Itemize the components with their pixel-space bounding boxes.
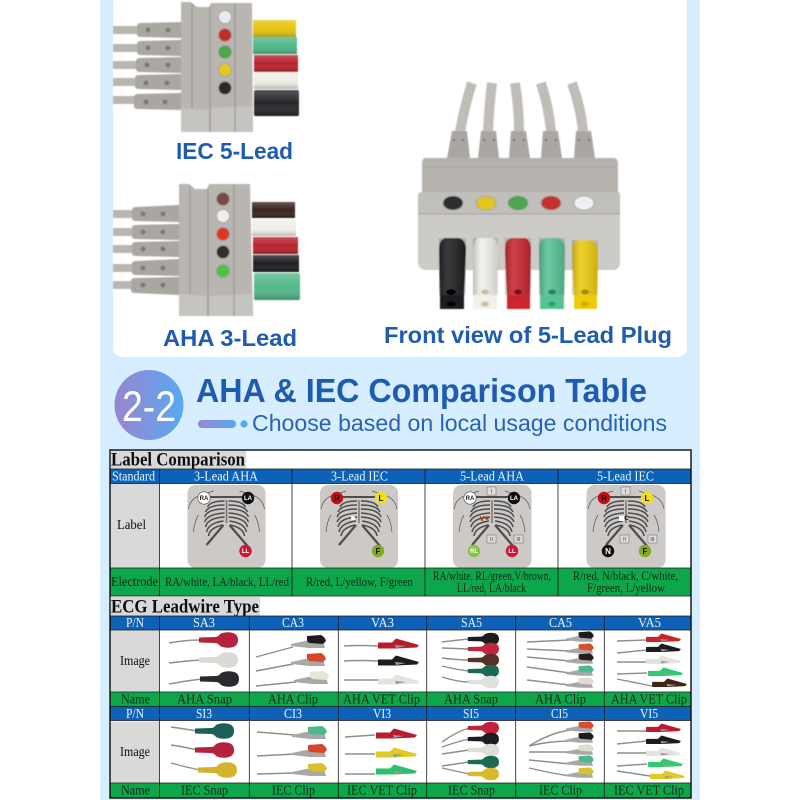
caption: Front view of 5-Lead Plug: Front view of 5-Lead Plug <box>384 322 672 348</box>
housing <box>179 184 253 316</box>
connector: IEC 5-lead side view <box>113 2 299 132</box>
leadwires: CI3 <box>257 726 327 776</box>
diagram: 3-lead AHA: LL <box>242 549 249 555</box>
leadwires: SI5 <box>442 722 499 780</box>
diagram: 3-lead AHA: LA <box>244 496 253 502</box>
relief holes <box>144 28 170 104</box>
leadwires: CA3 <box>256 635 329 686</box>
section subheading: Choose based on local usage conditions <box>252 410 667 436</box>
row: part numbers A: P/N <box>126 616 144 631</box>
row: part numbers B <box>110 706 691 722</box>
diagram: 5-lead AHA: II <box>490 537 493 543</box>
section badge 2-2 <box>114 370 184 440</box>
row: names A: AHA VET Clip <box>611 692 687 708</box>
diagram: 5-lead IEC: II <box>623 537 626 543</box>
row: names B: IEC Snap <box>448 784 495 798</box>
diagram: 5-lead AHA <box>453 485 532 568</box>
diagram: 5-lead AHA: LL <box>508 549 516 555</box>
row: Standard <box>110 469 691 484</box>
table outer border <box>110 450 691 798</box>
row: names A: Name <box>121 692 150 708</box>
plug shading <box>439 238 598 295</box>
row: names B <box>110 783 691 798</box>
diagram: 5-lead IEC: F <box>643 547 648 556</box>
row: Label <box>110 484 160 568</box>
leadwires: VA3 <box>344 638 419 684</box>
row: part numbers A: SA5 <box>461 616 482 631</box>
plug holes <box>446 289 589 306</box>
row: Standard: 5-Lead AHA <box>460 470 525 484</box>
leadwires: CA5 <box>527 631 594 688</box>
relief holes <box>140 212 166 288</box>
diagram: 3-lead AHA <box>188 485 266 568</box>
leadwires: VI3 <box>345 728 417 774</box>
plugs <box>252 202 300 300</box>
row: Electrode: R/red, L/yellow, F/green <box>306 575 414 589</box>
diagram: 5-lead AHA: RL <box>470 549 478 555</box>
diagram: 5-lead IEC: I <box>625 489 626 495</box>
row: Standard: Standard <box>112 470 155 484</box>
strain reliefs <box>134 22 181 110</box>
relief holes <box>453 139 590 141</box>
leadwires: SI3 <box>171 723 237 778</box>
cables <box>113 210 135 289</box>
row: names B: IEC Snap <box>181 784 228 798</box>
diagram: 5-lead AHA: III <box>516 537 521 543</box>
diagram: 3-lead IEC: R <box>334 494 340 503</box>
leadwires: VI5 <box>617 723 685 779</box>
caption: AHA 3-Lead: AHA 3-Lead <box>163 325 297 351</box>
row: part numbers B: P/N <box>126 707 144 722</box>
row: Electrode: LL/red, LA/black <box>457 581 527 595</box>
row: names A: AHA Clip <box>268 692 318 708</box>
row: part numbers B: SI3 <box>196 707 212 722</box>
row: part numbers A: VA3 <box>371 616 394 631</box>
row: names B: IEC VET Clip <box>614 784 684 798</box>
row: Electrode: R/red, N/black, C/white, <box>573 569 678 583</box>
diagram: 5-lead IEC: R <box>601 494 607 503</box>
row: Electrode: RA/white, LA/black, LL/red <box>165 575 290 589</box>
row: names B: IEC Clip <box>272 784 315 798</box>
diagram: 5-lead IEC <box>586 485 666 568</box>
cables <box>460 83 583 132</box>
leadwires: SA3 <box>169 632 239 687</box>
diagram: 5-lead IEC: III <box>650 537 655 543</box>
strain reliefs <box>131 205 179 295</box>
row: names A: AHA Clip <box>535 692 586 708</box>
leadwires: SA5 <box>442 633 499 688</box>
section heading: AHA & IEC Comparison Table <box>196 372 647 409</box>
row: Label: Label <box>117 518 146 533</box>
row: part numbers B: VI5 <box>640 707 658 722</box>
row: Electrode: RA/white, RL/green,V/brown, <box>433 569 551 583</box>
diagram: 5-lead AHA: V <box>480 516 485 523</box>
decorative pill and dot <box>198 420 248 428</box>
diagram: 3-lead IEC: F <box>376 547 381 556</box>
connector: AHA 3-lead side view <box>113 184 300 316</box>
diagram: 5-lead AHA: LA <box>510 496 519 502</box>
diagram: 5-lead AHA: RA <box>466 496 475 502</box>
row label: Image A: Image <box>120 654 150 669</box>
row: names A: AHA Snap <box>444 692 498 708</box>
comparison table <box>110 450 691 798</box>
white product card <box>113 0 687 357</box>
row label: Image B: Image <box>120 745 150 760</box>
row: names B: IEC Clip <box>539 784 582 798</box>
plugs <box>439 238 598 309</box>
cables <box>113 26 139 104</box>
row: part numbers A: CA3 <box>282 616 304 631</box>
heading: ECG Leadwire Type: ECG Leadwire Type <box>111 596 259 618</box>
indicator dots <box>218 10 232 94</box>
diagram: 3-lead IEC: L <box>379 494 384 503</box>
plug shading <box>253 20 299 116</box>
connector: front view of 5-lead plug <box>418 83 620 309</box>
row: part numbers B: VI3 <box>373 707 391 722</box>
housing <box>181 2 253 132</box>
row: Standard: 3-Lead AHA <box>194 470 259 484</box>
section badge 2-2: 2-2 <box>122 383 176 431</box>
leadwires: VA5 <box>617 633 687 687</box>
plug shading <box>252 202 300 300</box>
row: Electrode: Electrode <box>111 575 158 590</box>
plugs <box>253 20 299 116</box>
row: part numbers A: CA5 <box>549 616 572 631</box>
blue background panel <box>100 0 700 800</box>
diagram: 5-lead IEC: C <box>624 516 629 522</box>
row: part numbers B: SI5 <box>463 707 479 722</box>
diagram: 5-lead AHA: I <box>491 489 492 495</box>
heading: Label Comparison: Label Comparison <box>111 450 245 470</box>
diagram: 5-lead IEC: L <box>645 494 650 503</box>
diagram: 5-lead IEC: N <box>605 547 611 556</box>
row: names A <box>110 692 691 708</box>
leadwires: CI5 <box>529 721 594 778</box>
indicator dots <box>216 192 230 278</box>
row: Electrode: F/green, L/yellow <box>587 581 665 595</box>
diagram: 3-lead AHA: RA <box>200 496 209 502</box>
caption: IEC 5-Lead: IEC 5-Lead <box>176 138 293 164</box>
row: part numbers A: VA5 <box>638 616 661 631</box>
row label: Image A <box>110 630 160 692</box>
row: part numbers A <box>110 616 691 631</box>
row: part numbers B: CI3 <box>284 707 302 722</box>
row: part numbers B: CI5 <box>551 707 568 722</box>
row: names B: IEC VET Clip <box>347 784 417 798</box>
diagram: 3-lead IEC <box>320 485 398 568</box>
row: Electrode <box>110 568 691 596</box>
row label: Image B <box>110 722 160 783</box>
indicator dots <box>443 196 594 210</box>
row: names A: AHA Snap <box>177 692 232 708</box>
housing <box>422 158 618 192</box>
strain reliefs <box>447 131 595 158</box>
row: Standard: 3-Lead IEC <box>331 470 388 484</box>
row: Standard: 5-Lead IEC <box>597 470 654 484</box>
row: names A: AHA VET Clip <box>343 692 420 708</box>
row: part numbers A: SA3 <box>193 616 215 631</box>
row: names B: Name <box>121 784 150 798</box>
table grid lines <box>110 469 691 797</box>
